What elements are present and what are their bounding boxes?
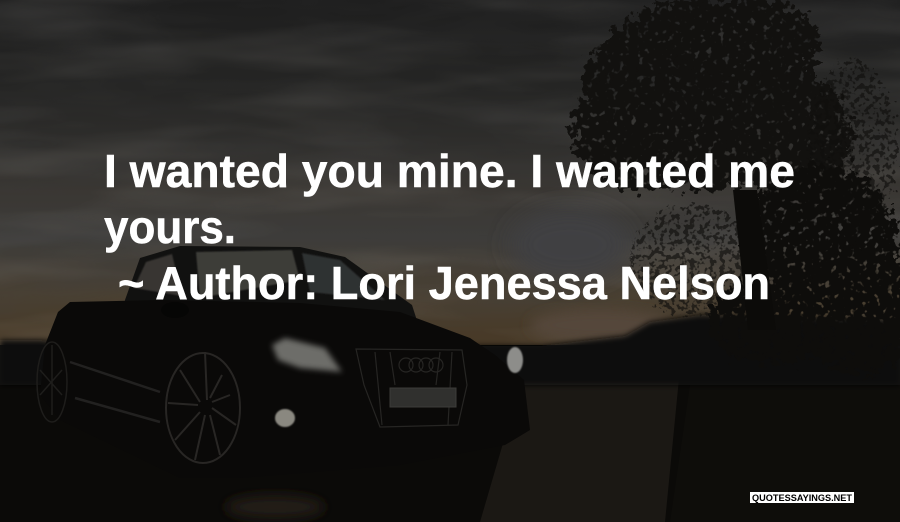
tree trunk [733, 190, 776, 330]
background: distant tree line [0, 315, 900, 385]
car licence plate [390, 388, 456, 407]
right dense foliage [710, 165, 900, 375]
car left headlight [272, 338, 342, 372]
car right headlight [507, 347, 523, 373]
car grille and badge [356, 349, 467, 427]
car wing mirror [161, 302, 189, 318]
tree lower foliage [628, 60, 895, 315]
car fog lamp [275, 409, 295, 427]
author line: ~ Author: Lori Jenessa Nelson [118, 257, 770, 309]
quote text [104, 145, 795, 309]
car body [40, 300, 530, 478]
tree crown [573, 0, 852, 197]
car side windows [196, 250, 300, 298]
illustration: large tree silhouette [573, 0, 900, 375]
car cabin [120, 246, 420, 330]
watermark badge: QUOTESSAYINGS.NET [752, 493, 852, 504]
car front wheel [166, 352, 240, 463]
illustration: car [37, 246, 530, 478]
quote line 2: yours. [104, 201, 236, 253]
quote line 1: I wanted you mine. I wanted me [104, 145, 795, 197]
background: ground and road [0, 345, 900, 522]
car door sills [70, 362, 160, 422]
car rear wheel [37, 342, 67, 422]
background: dusk sky [0, 0, 900, 350]
